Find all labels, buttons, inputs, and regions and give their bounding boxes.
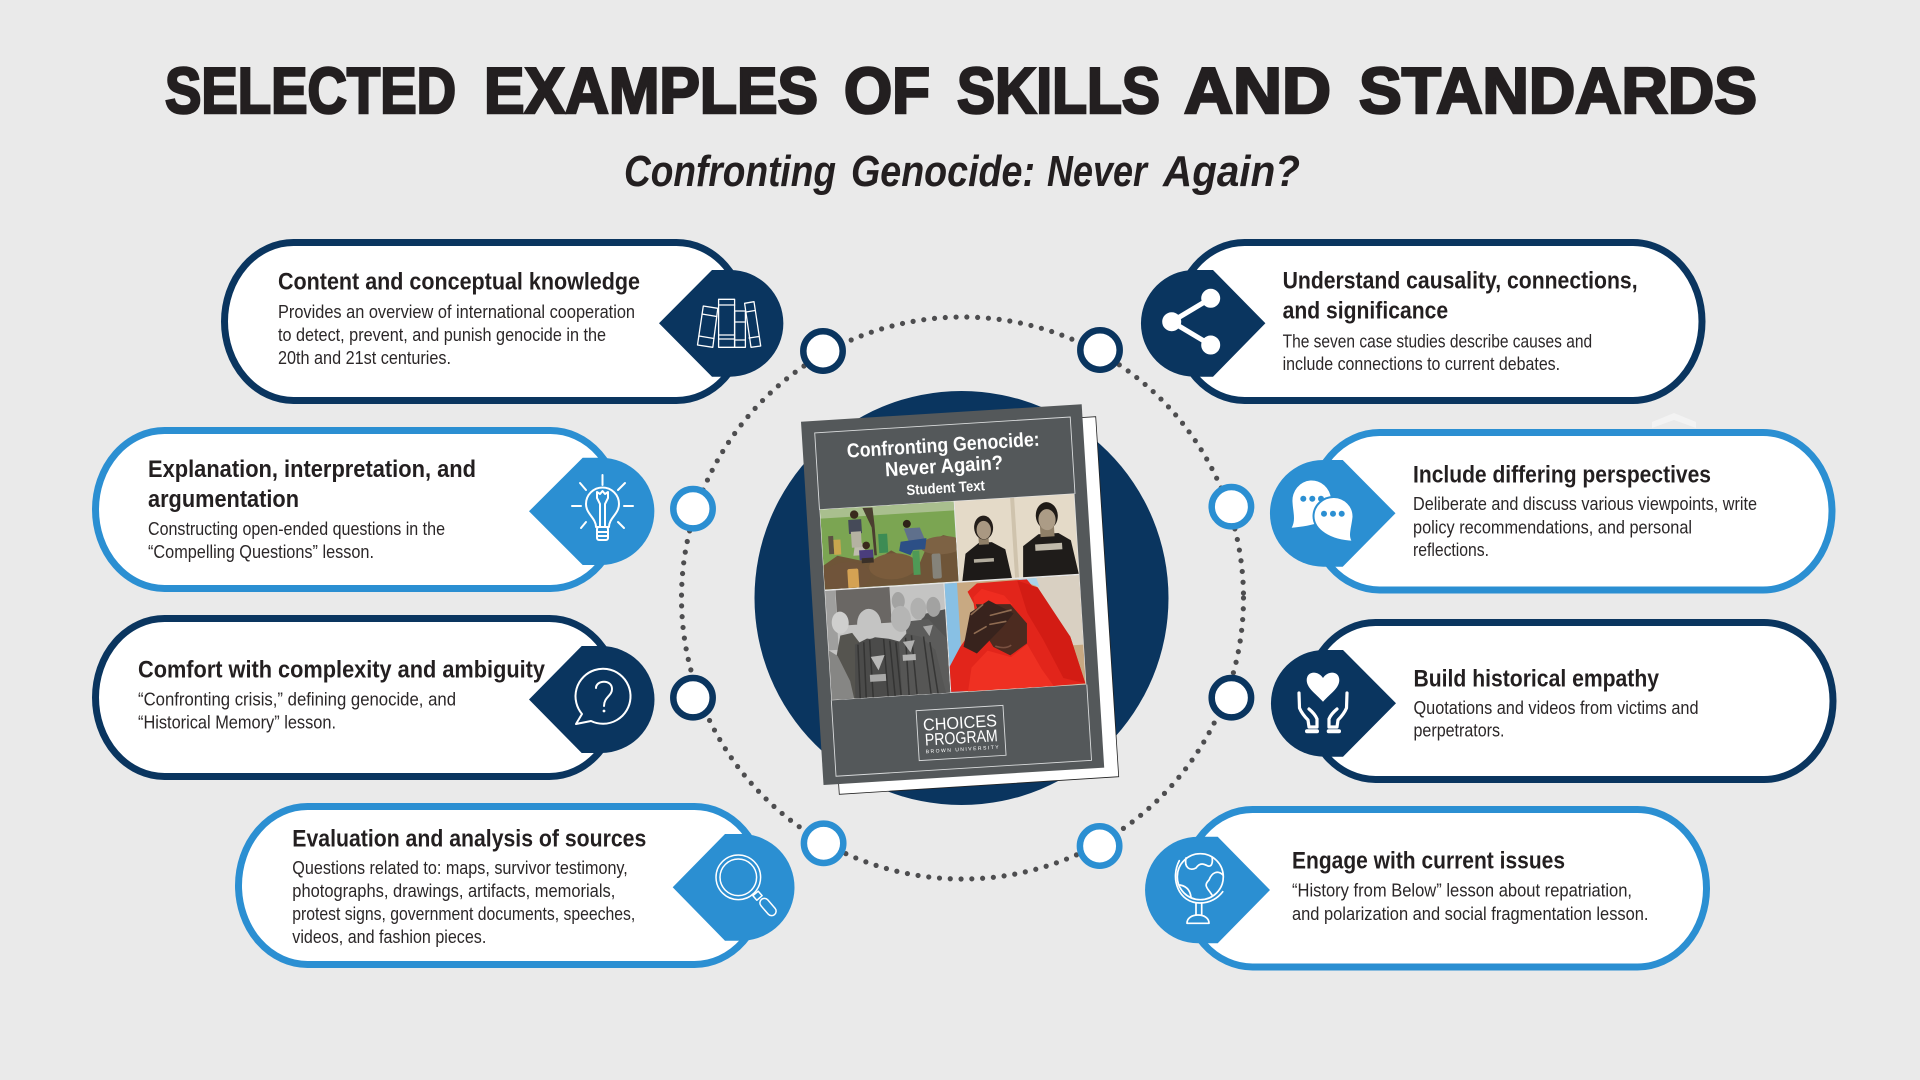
photo: woman in red <box>943 575 1086 693</box>
subtitle <box>624 147 1300 196</box>
icon: chat bubbles <box>1270 460 1396 567</box>
panel: include differing perspectives <box>1270 432 1832 590</box>
cover title: Confronting Genocide: <box>846 429 1040 463</box>
question dot <box>603 710 605 712</box>
photo: graveyard <box>818 501 966 592</box>
body text <box>1414 697 1698 741</box>
cover logo: PROGRAM <box>924 726 998 750</box>
heading: Engage with current issues <box>1292 847 1565 874</box>
dotted ring <box>682 317 1244 879</box>
cover logo <box>916 705 1006 761</box>
title <box>165 54 1757 127</box>
subtitle: Never <box>1047 147 1149 196</box>
heading: Evaluation and analysis of sources <box>292 826 646 853</box>
body text: “Confronting crisis,” defining genocide, and <box>138 689 456 710</box>
body text: Deliberate and discuss various viewpoints, write <box>1413 493 1757 514</box>
title: EXAMPLES <box>484 54 818 127</box>
body text <box>278 301 635 368</box>
pill <box>96 618 618 776</box>
panel: explanation, interpretation, argumentation <box>96 430 654 588</box>
title: SELECTED <box>165 54 456 127</box>
ring connector nodes <box>673 330 1251 866</box>
heading: and significance <box>1283 297 1448 324</box>
body text <box>292 857 635 947</box>
body text: “Historical Memory” lesson. <box>138 711 336 732</box>
panel: understand causality, connections, significance <box>1141 242 1702 400</box>
body text: include connections to current debates. <box>1283 353 1560 374</box>
icon: magnifying glass <box>673 834 794 941</box>
body text: “Compelling Questions” lesson. <box>148 541 374 562</box>
body text: perpetrators. <box>1414 720 1504 741</box>
cover title: Student Text <box>906 478 986 499</box>
pill <box>1306 622 1833 780</box>
heading: Include differing perspectives <box>1413 462 1711 489</box>
pill <box>224 242 746 400</box>
body text: videos, and fashion pieces. <box>292 926 486 947</box>
heading: argumentation <box>148 486 299 513</box>
body text: “History from Below” lesson about repatriation, <box>1292 880 1632 901</box>
photo: prisoners <box>825 583 951 700</box>
panel: content and conceptual knowledge <box>224 242 783 400</box>
pill <box>238 806 764 964</box>
body text: 20th and 21st centuries. <box>278 347 451 368</box>
body text <box>148 518 445 562</box>
body text <box>138 689 456 732</box>
body text: reflections. <box>1413 539 1489 560</box>
icon: heart in hands <box>1271 650 1396 757</box>
heading: Build historical empathy <box>1414 666 1660 693</box>
front cover <box>801 404 1104 785</box>
cover title: Never Again? <box>884 452 1004 481</box>
body text: policy recommendations, and personal <box>1413 516 1692 537</box>
subtitle: Genocide: <box>851 147 1035 196</box>
cover title <box>846 429 1043 503</box>
panel: comfort with complexity and ambiguity <box>96 618 654 776</box>
heading <box>148 456 476 513</box>
photo: two portraits <box>954 494 1079 582</box>
icon: question bubble <box>529 646 654 753</box>
title: AND <box>1184 54 1331 127</box>
body text: Quotations and videos from victims and <box>1414 697 1698 718</box>
title: OF <box>844 54 930 127</box>
cover logo: CHOICES <box>922 711 997 735</box>
pill <box>1184 810 1706 967</box>
body text <box>1283 330 1592 374</box>
body text: The seven case studies describe causes and <box>1283 330 1592 351</box>
heading: Comfort with complexity and ambiguity <box>138 657 546 684</box>
heading: Content and conceptual knowledge <box>278 268 640 295</box>
title: SKILLS <box>957 54 1160 127</box>
book cover illustration <box>801 404 1119 794</box>
heading <box>1283 267 1638 324</box>
panel: engage with current issues <box>1145 810 1706 967</box>
body text: protest signs, government documents, speeches, <box>292 903 635 924</box>
subtitle: Confronting <box>624 147 836 196</box>
subtitle: Again? <box>1162 147 1300 196</box>
icon: share nodes <box>1141 270 1265 377</box>
heading: Explanation, interpretation, and <box>148 456 476 483</box>
title: STANDARDS <box>1359 54 1757 127</box>
body text: and polarization and social fragmentation lesson. <box>1292 903 1648 924</box>
pill <box>1310 432 1832 590</box>
body text: Provides an overview of international cooperation <box>278 301 635 322</box>
body text: Constructing open-ended questions in the <box>148 518 445 539</box>
body text <box>1413 493 1757 560</box>
body text: to detect, prevent, and punish genocide in the <box>278 324 606 345</box>
body text <box>1292 880 1648 924</box>
icon: books <box>659 270 783 377</box>
body text: photographs, drawings, artifacts, memorials, <box>292 880 615 901</box>
pill <box>96 430 620 588</box>
heading: Understand causality, connections, <box>1283 267 1638 294</box>
cover logo: BROWN UNIVERSITY <box>926 745 1000 755</box>
panel: build historical empathy <box>1271 622 1833 780</box>
icon: light bulb <box>529 458 654 565</box>
panel: evaluation and analysis of sources <box>238 806 794 964</box>
body text: Questions related to: maps, survivor testimony, <box>292 857 628 878</box>
decorative faint chevron <box>1652 413 1696 428</box>
central navy circle <box>754 391 1168 805</box>
icon: globe <box>1145 837 1270 943</box>
back page <box>816 417 1119 794</box>
pill <box>1176 242 1702 400</box>
